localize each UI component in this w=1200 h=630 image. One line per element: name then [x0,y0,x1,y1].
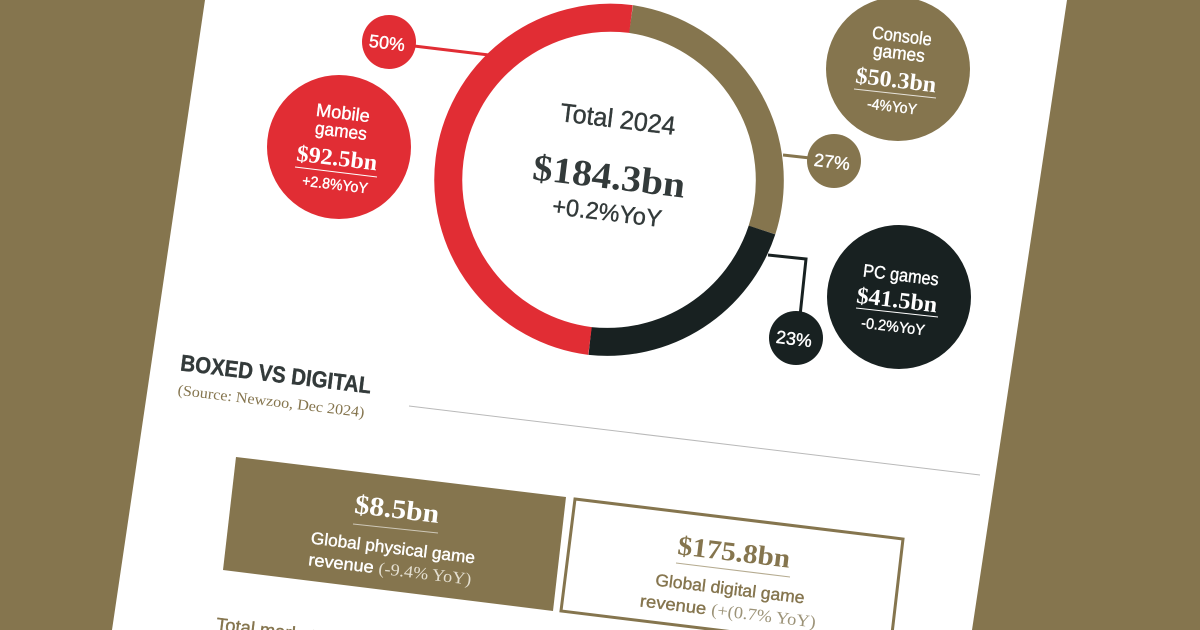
source note: (Source: Newzoo, Dec 2024) [177,383,365,421]
callout: console 27% [783,134,861,188]
callout: pc 23%: 23% [775,327,813,351]
panel: console games: $50.3bn [854,63,938,97]
panel: pc games: PC games [862,261,940,289]
heading: boxed vs digital: BOXED VS DIGITAL [179,350,373,398]
panel: console games [826,0,970,141]
donut chart [448,18,770,342]
page panel [112,0,1067,630]
callout: mobile 50%: 50% [368,31,406,55]
panel: mobile games: games [314,118,368,144]
donut centre text: Total 2024 [559,97,677,141]
donut centre text [531,97,688,233]
callout: pc 23% [768,255,823,365]
donut centre text: +0.2%YoY [551,193,663,233]
panel: digital revenue: $175.8bn [676,530,792,574]
panel: pc games: $41.5bn [855,283,939,317]
callout: console 27%: 27% [813,150,851,174]
panel: pc games [827,225,971,369]
panel: digital revenue: revenue (+(0.7% YoY) [639,591,817,630]
panel: console games: -4%YoY [866,96,918,118]
panel: console games: Console [871,22,933,50]
panel: digital revenue [561,499,903,630]
panel: physical revenue: $8.5bn [353,489,441,529]
panel: physical revenue: Global physical game [310,529,476,567]
callout: mobile 50% [362,15,489,69]
panel: digital revenue: Global digital game [654,571,806,607]
panel: console games: games [872,40,926,66]
panel: physical revenue [223,457,566,611]
panel: mobile games [267,75,411,219]
panel: pc games: -0.2%YoY [860,315,926,339]
donut centre text: $184.3bn [531,147,688,207]
panel: mobile games: $92.5bn [295,141,379,175]
panel: physical revenue: revenue (-9.4% YoY) [307,550,473,588]
panel: mobile games: Mobile [315,100,371,126]
panel: mobile games: +2.8%YoY [301,173,369,197]
